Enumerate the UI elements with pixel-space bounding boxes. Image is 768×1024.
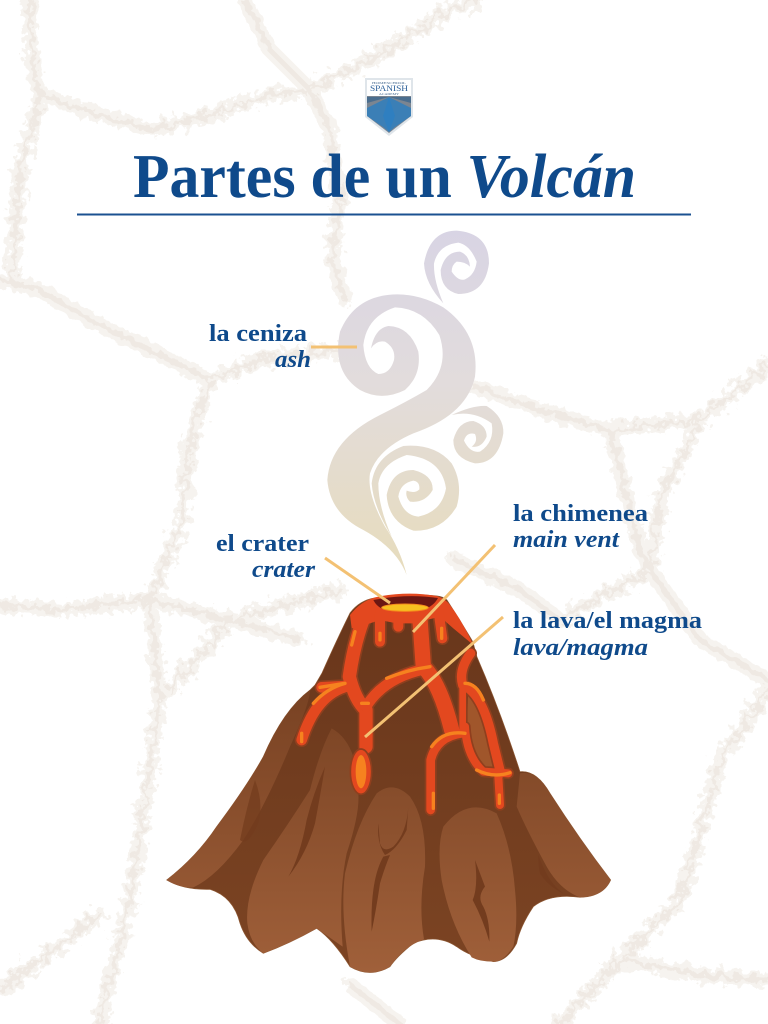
crater opening: [373, 596, 438, 611]
smoke: lower curl: [372, 446, 459, 537]
smoke: right curl: [452, 406, 503, 463]
volcano lobe left: [247, 728, 359, 953]
label: crater: el crater: [216, 531, 309, 557]
label: ash: la ceniza: [209, 321, 307, 347]
label: crater: [216, 531, 316, 583]
logo: Homeschool Spanish Academy shield: SPANISH: [370, 84, 408, 93]
volcano lobe right: [440, 807, 516, 962]
smoke plume: [327, 231, 503, 575]
title rule: [77, 214, 691, 216]
label: lava and magma: lava/magma: [513, 635, 648, 661]
label: main vent: [513, 501, 648, 553]
leader line: main vent: [413, 545, 495, 632]
label: crater: crater: [252, 557, 316, 583]
volcano body: [167, 595, 611, 972]
logo: Homeschool Spanish Academy shield: HOMESCHOOL: [372, 81, 406, 85]
label: ash: ash: [275, 347, 311, 373]
volcano creases: [240, 767, 563, 942]
label: ash: [209, 321, 311, 373]
logo: Homeschool Spanish Academy shield: ACADEMY: [379, 92, 400, 96]
title: Partes de un Volcán: [133, 143, 636, 211]
smoke: main swirl: [327, 294, 476, 575]
label: main vent: main vent: [513, 527, 620, 553]
lava drip blob: [350, 749, 372, 794]
leader line: lava: [365, 617, 503, 737]
lava dark outlines: [302, 610, 508, 810]
lava orange highlights: [302, 628, 510, 808]
label: lava and magma: [513, 608, 702, 661]
smoke: top curl: [424, 231, 489, 303]
lava inner lobe on right flank: [467, 687, 497, 767]
crater dark interior: [373, 596, 438, 609]
leader line: ash: [311, 346, 357, 348]
volcano lobe centre: [343, 787, 425, 972]
volcano lobe far left: [167, 690, 310, 887]
lava red flows: [302, 610, 508, 810]
lava flows: [302, 594, 510, 810]
leader line: crater: [325, 558, 390, 603]
label: lava and magma: la lava/el magma: [513, 608, 702, 634]
label: main vent: la chimenea: [513, 501, 648, 527]
lava drip highlight: [356, 755, 366, 788]
volcano silhouette: [167, 595, 611, 972]
volcano lobe far right: [517, 773, 611, 897]
logo: Homeschool Spanish Academy shield: [365, 78, 413, 136]
crater rim and cap: [350, 594, 473, 645]
molten pool: [382, 604, 428, 611]
